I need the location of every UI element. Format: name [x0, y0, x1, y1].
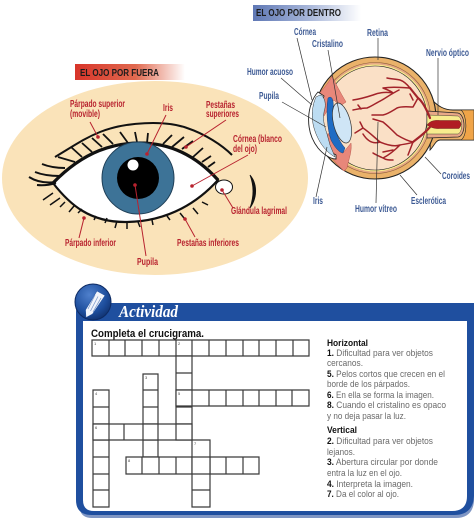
aqueous humour [312, 95, 335, 157]
column 2 [176, 356, 192, 440]
clues: vertical: lejanos. [327, 447, 355, 458]
clues: horizontal: 6. En ella se forma la imagen. [327, 390, 434, 401]
leader lines [79, 115, 248, 256]
column 7 [192, 440, 210, 507]
iris [327, 97, 345, 153]
background ellipse [2, 81, 308, 275]
row 1 [92, 340, 309, 356]
cell numbers: 5 [178, 391, 181, 396]
icon: outer eye [29, 123, 256, 229]
panel: actividad [75, 284, 474, 518]
labels: outer eye: Pestañas inferiores [177, 238, 239, 249]
clues: vertical: 2. Dificultad para ver objetos [327, 436, 433, 447]
labels: inner eye: Iris [313, 196, 323, 207]
eyebrow curve [250, 175, 256, 208]
nerve layers [427, 111, 464, 138]
pupil [117, 157, 159, 199]
cell numbers: 1 [94, 341, 97, 346]
clues: vertical [327, 425, 438, 500]
labels: outer eye: Córnea (blanco [233, 134, 282, 145]
heading: el ojo por dentro [253, 5, 361, 21]
labels: inner eye: Retina [367, 28, 388, 39]
leader lines [281, 38, 441, 203]
labels: inner eye: Esclerótica [411, 196, 446, 207]
labels: outer eye: (movible) [70, 109, 100, 120]
labels: outer eye: Pupila [137, 257, 158, 268]
lens [329, 101, 355, 145]
heading: el ojo por fuera [75, 64, 185, 80]
labels: outer eye: del ojo) [233, 144, 257, 155]
row 6 [93, 424, 192, 440]
crossword grid [92, 340, 309, 507]
clues: horizontal [327, 338, 446, 422]
column 3 [143, 374, 158, 457]
icon: eyeball cross-section [309, 57, 474, 179]
labels: outer eye: superiores [206, 109, 239, 120]
heading: el ojo por dentro: EL OJO POR DENTRO [256, 8, 341, 19]
cell numbers: 4 [95, 391, 98, 396]
labels: outer eye: Iris [163, 103, 173, 114]
cell numbers [94, 341, 197, 463]
clues: horizontal: 5. Pelos cortos que crecen en el [327, 369, 445, 380]
clues: vertical: 3. Abertura circular por donde [327, 457, 438, 468]
clues: vertical: 7. Da el color al ojo. [327, 489, 399, 500]
row 5 [176, 390, 309, 406]
globe layers [314, 57, 436, 179]
tear gland [216, 180, 232, 194]
labels: inner eye [247, 27, 470, 215]
labels: inner eye: Humor acuoso [247, 67, 293, 78]
cell numbers: 8 [128, 458, 131, 463]
clues: horizontal: cercanos. [327, 358, 363, 369]
clues: vertical: 4. Interpreta la imagen. [327, 479, 413, 490]
cell numbers: 2 [178, 341, 181, 346]
cornea [309, 92, 336, 159]
clues: horizontal: y no deja pasar la luz. [327, 411, 406, 422]
cell numbers: 6 [95, 425, 98, 430]
labels: outer eye: Glándula lagrimal [231, 206, 287, 217]
labels: outer eye: Párpado inferior [65, 238, 116, 249]
ciliary body [318, 76, 346, 116]
labels: inner eye: Cristalino [312, 39, 343, 50]
icon: pencil badge [75, 284, 111, 320]
labels: inner eye: Córnea [294, 27, 316, 38]
cell numbers: 7 [194, 441, 197, 446]
clues: horizontal: borde de los párpados. [327, 379, 410, 390]
clues: vertical: entra la luz en el ojo. [327, 468, 402, 479]
panel bottom shadow [80, 490, 474, 518]
heading: el ojo por fuera: EL OJO POR FUERA [80, 68, 159, 79]
labels: outer eye: Párpado superior [70, 99, 125, 110]
panel: el ojo por dentro [247, 5, 474, 215]
row 8 [126, 457, 259, 474]
instruction: Completa el crucigrama. [91, 328, 204, 340]
cell numbers: 3 [145, 375, 148, 380]
retinal veins [353, 78, 430, 160]
labels: inner eye: Humor vítreo [355, 204, 397, 215]
red retinal trunk [427, 120, 461, 129]
panel frame [76, 303, 474, 515]
column 4 [93, 390, 109, 507]
iris [102, 142, 174, 214]
clues: horizontal: 1. Dificultad para ver objetos [327, 348, 433, 359]
optic nerve [430, 100, 474, 150]
heading: actividad: Actividad [118, 302, 178, 321]
panel: el ojo por fuera [2, 64, 308, 275]
labels: inner eye: Pupila [259, 91, 279, 102]
labels: outer eye [65, 99, 287, 268]
clues: vertical: Vertical [327, 425, 357, 436]
clues: horizontal: Horizontal [327, 338, 368, 349]
clues: horizontal: 8. Cuando el cristalino es opaco [327, 400, 446, 411]
labels: outer eye: Pestañas [206, 100, 235, 111]
